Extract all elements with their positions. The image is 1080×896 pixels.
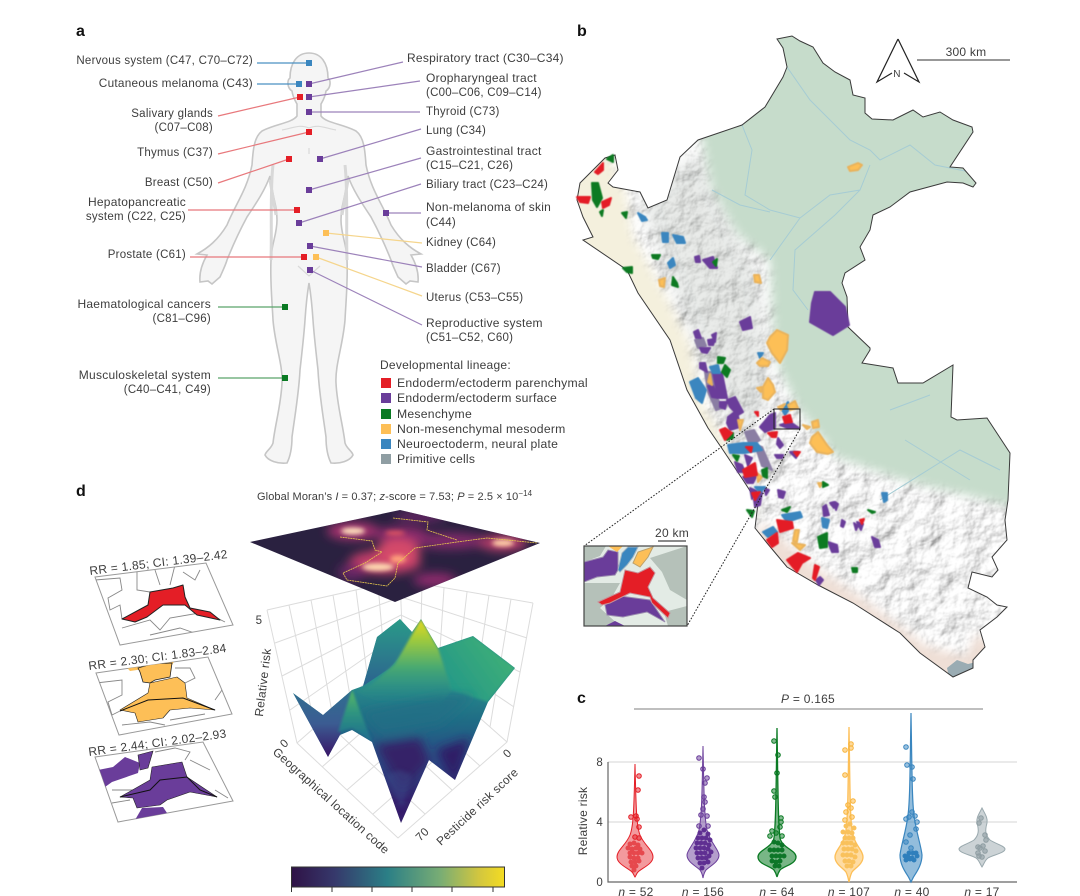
right site labels: Gastrointestinal tract — [426, 144, 542, 158]
inset map: purple: RR = 2.44; CI: 2.02–2.93 — [88, 726, 227, 759]
left site labels: Thymus (C37) — [137, 147, 213, 159]
violin: red — [617, 764, 653, 877]
Moran statistic title: Global Moran’s I = 0.37; z-score = 7.53; P = 2.5 × 10 — [257, 491, 518, 503]
inset map: purple — [88, 726, 233, 822]
right site labels: Oropharyngeal tract — [426, 71, 537, 85]
north arrow: N — [893, 69, 901, 80]
left site labels — [76, 55, 253, 396]
left site labels: (C81–C96) — [152, 313, 211, 325]
grid lines and axes — [608, 762, 1017, 822]
y axis labels: 8 — [596, 757, 603, 769]
right site labels: Reproductive system — [426, 316, 543, 330]
left site labels: system (C22, C25) — [86, 211, 186, 223]
3D axis labels: Geographical location code — [270, 745, 392, 857]
panel a: body map of cancer sites — [76, 23, 588, 466]
3D grid box — [267, 580, 533, 838]
left site labels: (C07–C08) — [154, 122, 213, 134]
left site labels: Breast (C50) — [145, 177, 213, 189]
3D axis labels: Relative risk — [252, 647, 274, 717]
left site labels: (C40–C41, C49) — [124, 384, 211, 396]
legend: developmental lineage: Neuroectoderm, neural plate — [397, 437, 558, 451]
3D axis labels — [252, 615, 521, 857]
right site labels: Kidney (C64) — [426, 237, 496, 249]
lineage regions: purple — [694, 256, 880, 585]
3D axis labels: 0 — [501, 747, 514, 760]
callout lines red — [188, 97, 309, 257]
map outline — [577, 36, 1010, 677]
right site labels: (C15–C21, C26) — [426, 160, 513, 172]
legend: developmental lineage: Endoderm/ectoderm parenchymal — [397, 376, 588, 390]
violin: grey — [959, 808, 1005, 867]
3D axis labels: 5 — [256, 615, 262, 627]
right site labels — [407, 51, 564, 344]
panel letter d: d — [76, 483, 86, 500]
right site labels: (C00–C06, C09–C14) — [426, 87, 542, 99]
scale bar 300 km: 300 km — [946, 45, 986, 59]
y axis labels: Relative risk — [576, 786, 590, 855]
legend: developmental lineage — [380, 358, 588, 466]
left site labels: Salivary glands — [131, 108, 213, 120]
lineage regions: grey-purple mixed clusters — [695, 338, 772, 470]
violin: green — [758, 728, 796, 877]
right site labels: Non-melanoma of skin — [426, 200, 551, 214]
inset locator box and dotted leader lines — [584, 409, 800, 626]
left site labels: Nervous system (C47, C70–C72) — [76, 55, 253, 67]
panel letter c: c — [577, 690, 586, 707]
inset map: red — [89, 547, 233, 645]
right site labels: Thyroid (C73) — [426, 106, 500, 118]
projected heat map — [250, 510, 540, 602]
right site labels: Uterus (C53–C55) — [426, 292, 523, 304]
3D relative risk surface — [293, 619, 515, 823]
right site labels: Bladder (C67) — [426, 263, 501, 275]
right site labels: Biliary tract (C23–C24) — [426, 179, 548, 191]
scale bar 300 km — [917, 45, 1010, 60]
right site labels: Lung (C34) — [426, 125, 486, 137]
right site labels: (C51–C52, C60) — [426, 332, 513, 344]
violin: yellow — [835, 727, 863, 882]
human body silhouette — [197, 53, 421, 463]
inset map: red: RR = 1.85; CI: 1.39–2.42 — [89, 547, 228, 578]
callout lines blue — [257, 63, 306, 84]
3D axis labels: 0 — [278, 737, 291, 750]
map terrain — [578, 36, 1010, 676]
violin: blue — [900, 713, 922, 882]
callout lines purple — [299, 62, 422, 325]
left site labels: Haematological cancers — [77, 297, 211, 311]
callout lines green — [218, 307, 285, 378]
callout lines yellow — [316, 233, 422, 296]
y axis labels — [576, 757, 603, 889]
left site labels: Hepatopancreatic — [88, 195, 186, 209]
inset scale bar 20 km: 20 km — [655, 526, 689, 540]
Moran statistic title: −14 — [518, 489, 533, 498]
3D axis labels: 70 — [414, 826, 432, 844]
colour bar — [292, 867, 504, 892]
panel d: spatial relative risk — [76, 483, 540, 892]
lineage regions: blue — [638, 213, 887, 537]
y axis labels: 4 — [596, 817, 603, 829]
violin: purple — [687, 746, 719, 878]
panel b: map of Peru — [570, 20, 1030, 690]
inset map: yellow — [88, 641, 232, 735]
legend: developmental lineage: Non-mesenchymal mesoderm — [397, 422, 566, 436]
lineage regions: yellow — [659, 163, 862, 550]
right site labels: Respiratory tract (C30–C34) — [407, 51, 564, 65]
panel c: violin plots of relative risk — [576, 690, 1017, 896]
left site labels: Musculoskeletal system — [79, 368, 211, 382]
north arrow — [877, 39, 919, 82]
3D axis labels: Pesticide risk score — [433, 765, 521, 848]
legend: developmental lineage: Endoderm/ectoderm surface — [397, 391, 557, 405]
panel letter a: a — [76, 23, 85, 40]
y axis labels: 0 — [596, 877, 603, 889]
legend: developmental lineage: Developmental lineage: — [380, 358, 511, 372]
panel letter b: b — [577, 23, 587, 40]
sample size labels — [618, 885, 1000, 896]
site markers — [282, 60, 389, 381]
right site labels: (C44) — [426, 217, 456, 229]
left site labels: Prostate (C61) — [108, 249, 186, 261]
inset map — [584, 546, 687, 626]
inset map: yellow: RR = 2.30; CI: 1.83–2.84 — [88, 641, 227, 673]
left site labels: Cutaneous melanoma (C43) — [99, 76, 253, 90]
lineage regions: green — [592, 155, 875, 572]
legend: developmental lineage: Primitive cells — [397, 452, 475, 466]
P value bracket: P = 0.165 — [781, 692, 835, 706]
lineage regions: red — [577, 163, 864, 580]
inset frame — [584, 546, 687, 626]
legend: developmental lineage: Mesenchyme — [397, 407, 472, 421]
